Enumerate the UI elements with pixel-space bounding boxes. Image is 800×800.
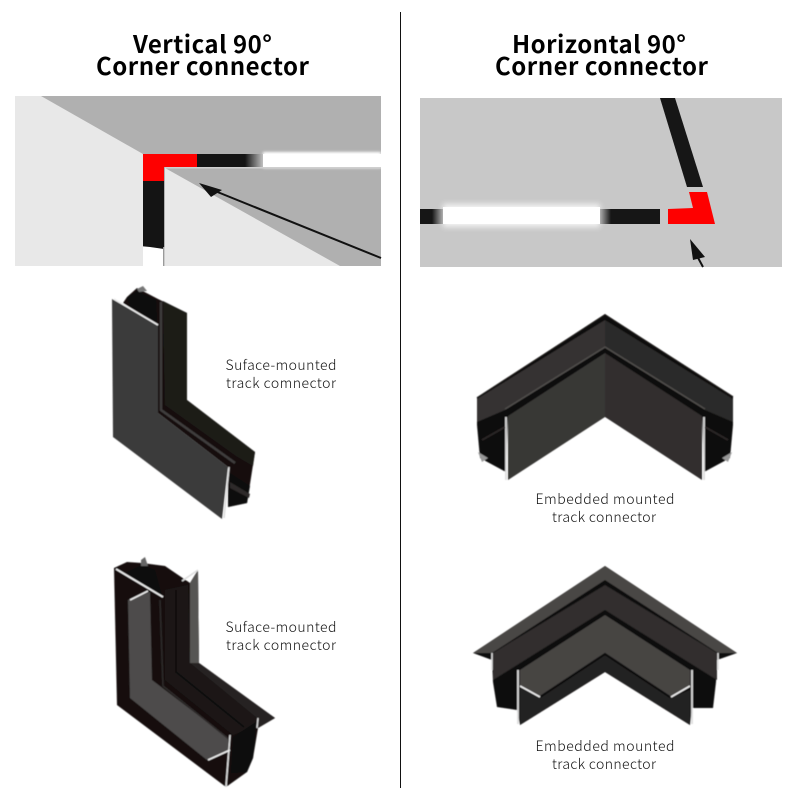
product: embedded horizontal track connector with flange [473, 566, 737, 725]
label: surface-mounted connector 1: Suface-mounted [226, 355, 336, 375]
label: embedded connector 2 [536, 736, 674, 774]
title: horizontal corner connector: Corner connector [495, 47, 709, 82]
title: horizontal corner connector [495, 25, 709, 82]
label: embedded connector 2: Embedded mounted [536, 736, 674, 756]
product: embedded horizontal track connector [477, 314, 733, 480]
label: surface-mounted connector 2 [226, 617, 337, 655]
arrow: horizontal connector pointer [690, 239, 705, 267]
title: horizontal corner connector: Horizontal 90° [512, 25, 686, 60]
arrow: vertical connector pointer [199, 183, 381, 258]
label: surface-mounted connector 1: track comnector [226, 373, 337, 393]
label: embedded connector 2: track connector [552, 754, 657, 774]
label: embedded connector 1: track connector [552, 507, 657, 527]
center divider [400, 12, 401, 788]
photo: horizontal corner installation [420, 98, 782, 267]
title: vertical corner connector: Corner connector [96, 47, 310, 82]
title: vertical corner connector [96, 25, 310, 82]
label: surface-mounted connector 2: Suface-mounted [226, 617, 336, 637]
title: vertical corner connector: Vertical 90° [132, 25, 272, 60]
label: surface-mounted connector 2: track comnector [226, 635, 337, 655]
photo: vertical corner installation [15, 96, 381, 266]
label: embedded connector 1: Embedded mounted [536, 489, 674, 509]
product: surface-mounted vertical track connector with flange [114, 557, 275, 787]
product: surface-mounted vertical track connector [112, 286, 255, 519]
label: embedded connector 1 [536, 489, 674, 527]
label: surface-mounted connector 1 [226, 355, 337, 393]
